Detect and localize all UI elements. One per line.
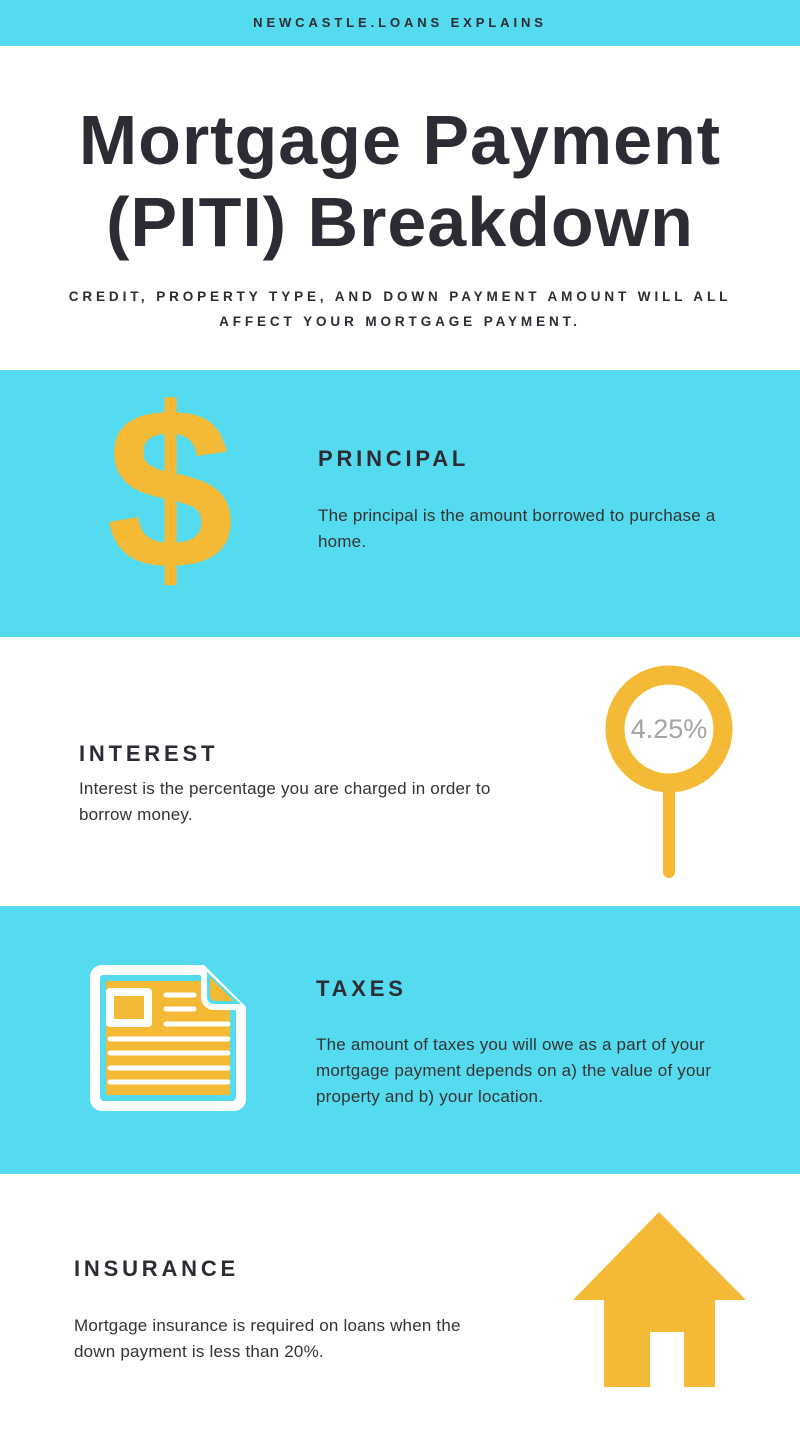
subtitle: AFFECT YOUR MORTGAGE PAYMENT. [219, 314, 581, 329]
icon: house [573, 1212, 746, 1387]
panel: interest [79, 666, 732, 878]
icon: document [90, 965, 246, 1111]
top bar [0, 0, 800, 46]
subtitle [69, 289, 731, 329]
heading: insurance: INSURANCE [74, 1256, 239, 1281]
text: interest: Interest is the percentage you are charged in order to borrow money. [79, 779, 490, 824]
title: (PITI) Breakdown [106, 183, 694, 261]
heading: principal: PRINCIPAL [318, 446, 469, 471]
panel: principal [0, 370, 800, 637]
subtitle: CREDIT, PROPERTY TYPE, AND DOWN PAYMENT AMOUNT WILL ALL [69, 289, 731, 304]
title [79, 101, 721, 261]
text: insurance: Mortgage insurance is required on loans when the down payment is less than 20%. [74, 1316, 461, 1361]
text: principal: The principal is the amount borrowed to purchase a home. [318, 506, 715, 551]
top bar: NEWCASTLE.LOANS EXPLAINS [253, 15, 547, 30]
icon: magnifier with rate: 4.25% [631, 714, 707, 744]
panel: insurance [74, 1212, 746, 1387]
title: Mortgage Payment [79, 101, 721, 179]
panel: taxes [0, 906, 800, 1174]
icon: magnifier with rate [606, 666, 732, 878]
text: taxes: The amount of taxes you will owe as a part of your mortgage payment depends on a) the value of your property and b) your location. [316, 1035, 711, 1106]
heading: taxes: TAXES [316, 976, 407, 1001]
heading: interest: INTEREST [79, 741, 218, 766]
